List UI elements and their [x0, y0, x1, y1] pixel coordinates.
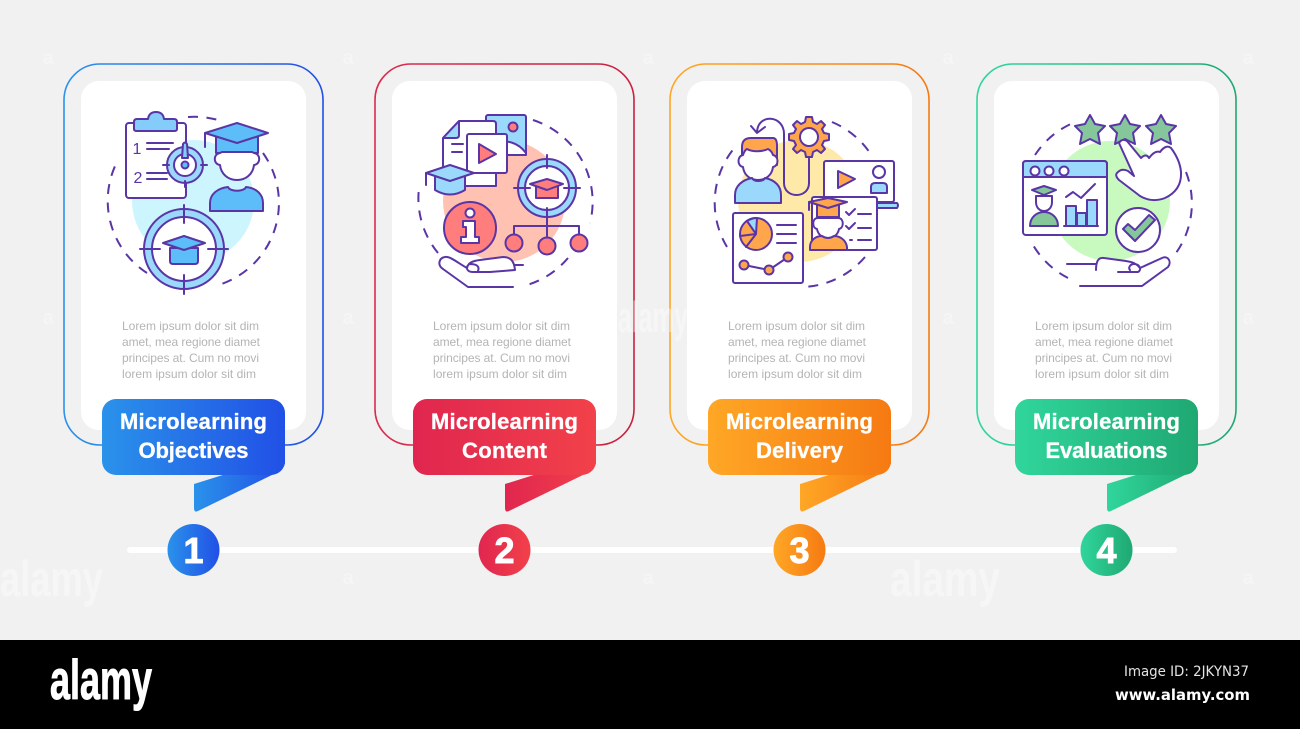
watermarks: a — [342, 307, 354, 329]
heading banner — [1015, 399, 1198, 512]
text block: lorem ipsum dolor sit dim — [433, 367, 567, 381]
text block: Lorem ipsum dolor sit dim — [433, 319, 570, 333]
text block: Lorem ipsum dolor sit dim — [122, 319, 259, 333]
heading banner: Microlearning — [431, 409, 578, 434]
step number 3: 3 — [789, 530, 810, 571]
heading banner: Delivery — [756, 438, 844, 463]
panel 2 card — [392, 81, 617, 430]
text block: lorem ipsum dolor sit dim — [1035, 367, 1169, 381]
watermarks: a — [942, 307, 954, 329]
text block — [1035, 319, 1174, 381]
watermarks: a — [642, 47, 654, 69]
watermarks: a — [42, 307, 54, 329]
heading banner: Content — [462, 438, 548, 463]
icon: objectives target and student: 1 — [133, 141, 142, 158]
website: www.alamy.com — [1115, 686, 1250, 704]
text block: amet, mea regione diamet — [122, 335, 261, 349]
icon: objectives target and student: 2 — [134, 170, 143, 187]
step number 1: 1 — [183, 530, 204, 571]
icon: evaluation stars and report — [1023, 115, 1192, 286]
panel 4 card — [994, 81, 1219, 430]
step number 2 — [478, 524, 530, 576]
watermarks: a — [342, 47, 354, 69]
text block: principes at. Cum no movi — [433, 351, 570, 365]
heading banner: Objectives — [138, 438, 248, 463]
text block: amet, mea regione diamet — [728, 335, 867, 349]
step number 1 — [168, 524, 220, 576]
watermarks: a — [1242, 47, 1254, 69]
panel: microlearning objectives — [64, 64, 323, 576]
heading banner: Microlearning — [120, 409, 267, 434]
icon: content files and information — [418, 115, 593, 287]
text block — [728, 319, 867, 381]
panel: microlearning evaluations — [977, 64, 1236, 576]
step number 4 — [1080, 524, 1132, 576]
text block: amet, mea regione diamet — [1035, 335, 1174, 349]
footer logo: alamy — [50, 648, 152, 711]
text block: Lorem ipsum dolor sit dim — [1035, 319, 1172, 333]
image id: Image ID: 2JKYN37 — [1124, 664, 1249, 680]
heading banner — [102, 399, 285, 512]
icon: objectives target and student — [108, 112, 279, 294]
watermarks: a — [942, 47, 954, 69]
text block: lorem ipsum dolor sit dim — [728, 367, 862, 381]
panel 1 card — [81, 81, 306, 430]
footer bar — [0, 640, 1300, 729]
text block: Lorem ipsum dolor sit dim — [728, 319, 865, 333]
heading banner — [413, 399, 596, 512]
step number 4: 4 — [1096, 530, 1117, 571]
watermarks: a — [42, 47, 54, 69]
text block: principes at. Cum no movi — [122, 351, 259, 365]
watermarks: a — [1242, 307, 1254, 329]
heading banner: Microlearning — [726, 409, 873, 434]
text block: amet, mea regione diamet — [433, 335, 572, 349]
panel 1 outline — [64, 64, 323, 445]
watermarks: a — [1242, 567, 1254, 589]
step number 3 — [774, 524, 826, 576]
panel 3 outline — [670, 64, 929, 445]
heading banner — [708, 399, 891, 512]
text block: principes at. Cum no movi — [728, 351, 865, 365]
heading banner: Microlearning — [1033, 409, 1180, 434]
watermarks: alamy — [0, 551, 103, 607]
icon: delivery people, video and charts — [715, 117, 898, 287]
panel 4 outline — [977, 64, 1236, 445]
watermarks: a — [642, 567, 654, 589]
watermarks — [0, 47, 1254, 607]
step number 2: 2 — [494, 530, 515, 571]
watermarks: alamy — [618, 293, 688, 342]
watermarks: a — [342, 567, 354, 589]
text block — [433, 319, 572, 381]
text block — [122, 319, 261, 381]
timeline line — [127, 547, 1177, 553]
text block: principes at. Cum no movi — [1035, 351, 1172, 365]
panel: microlearning content — [375, 64, 634, 576]
heading banner: Evaluations — [1046, 438, 1168, 463]
panel 3 card — [687, 81, 912, 430]
text block: lorem ipsum dolor sit dim — [122, 367, 256, 381]
panel 2 outline — [375, 64, 634, 445]
panel: microlearning delivery — [670, 64, 929, 576]
watermarks: alamy — [890, 551, 1000, 607]
